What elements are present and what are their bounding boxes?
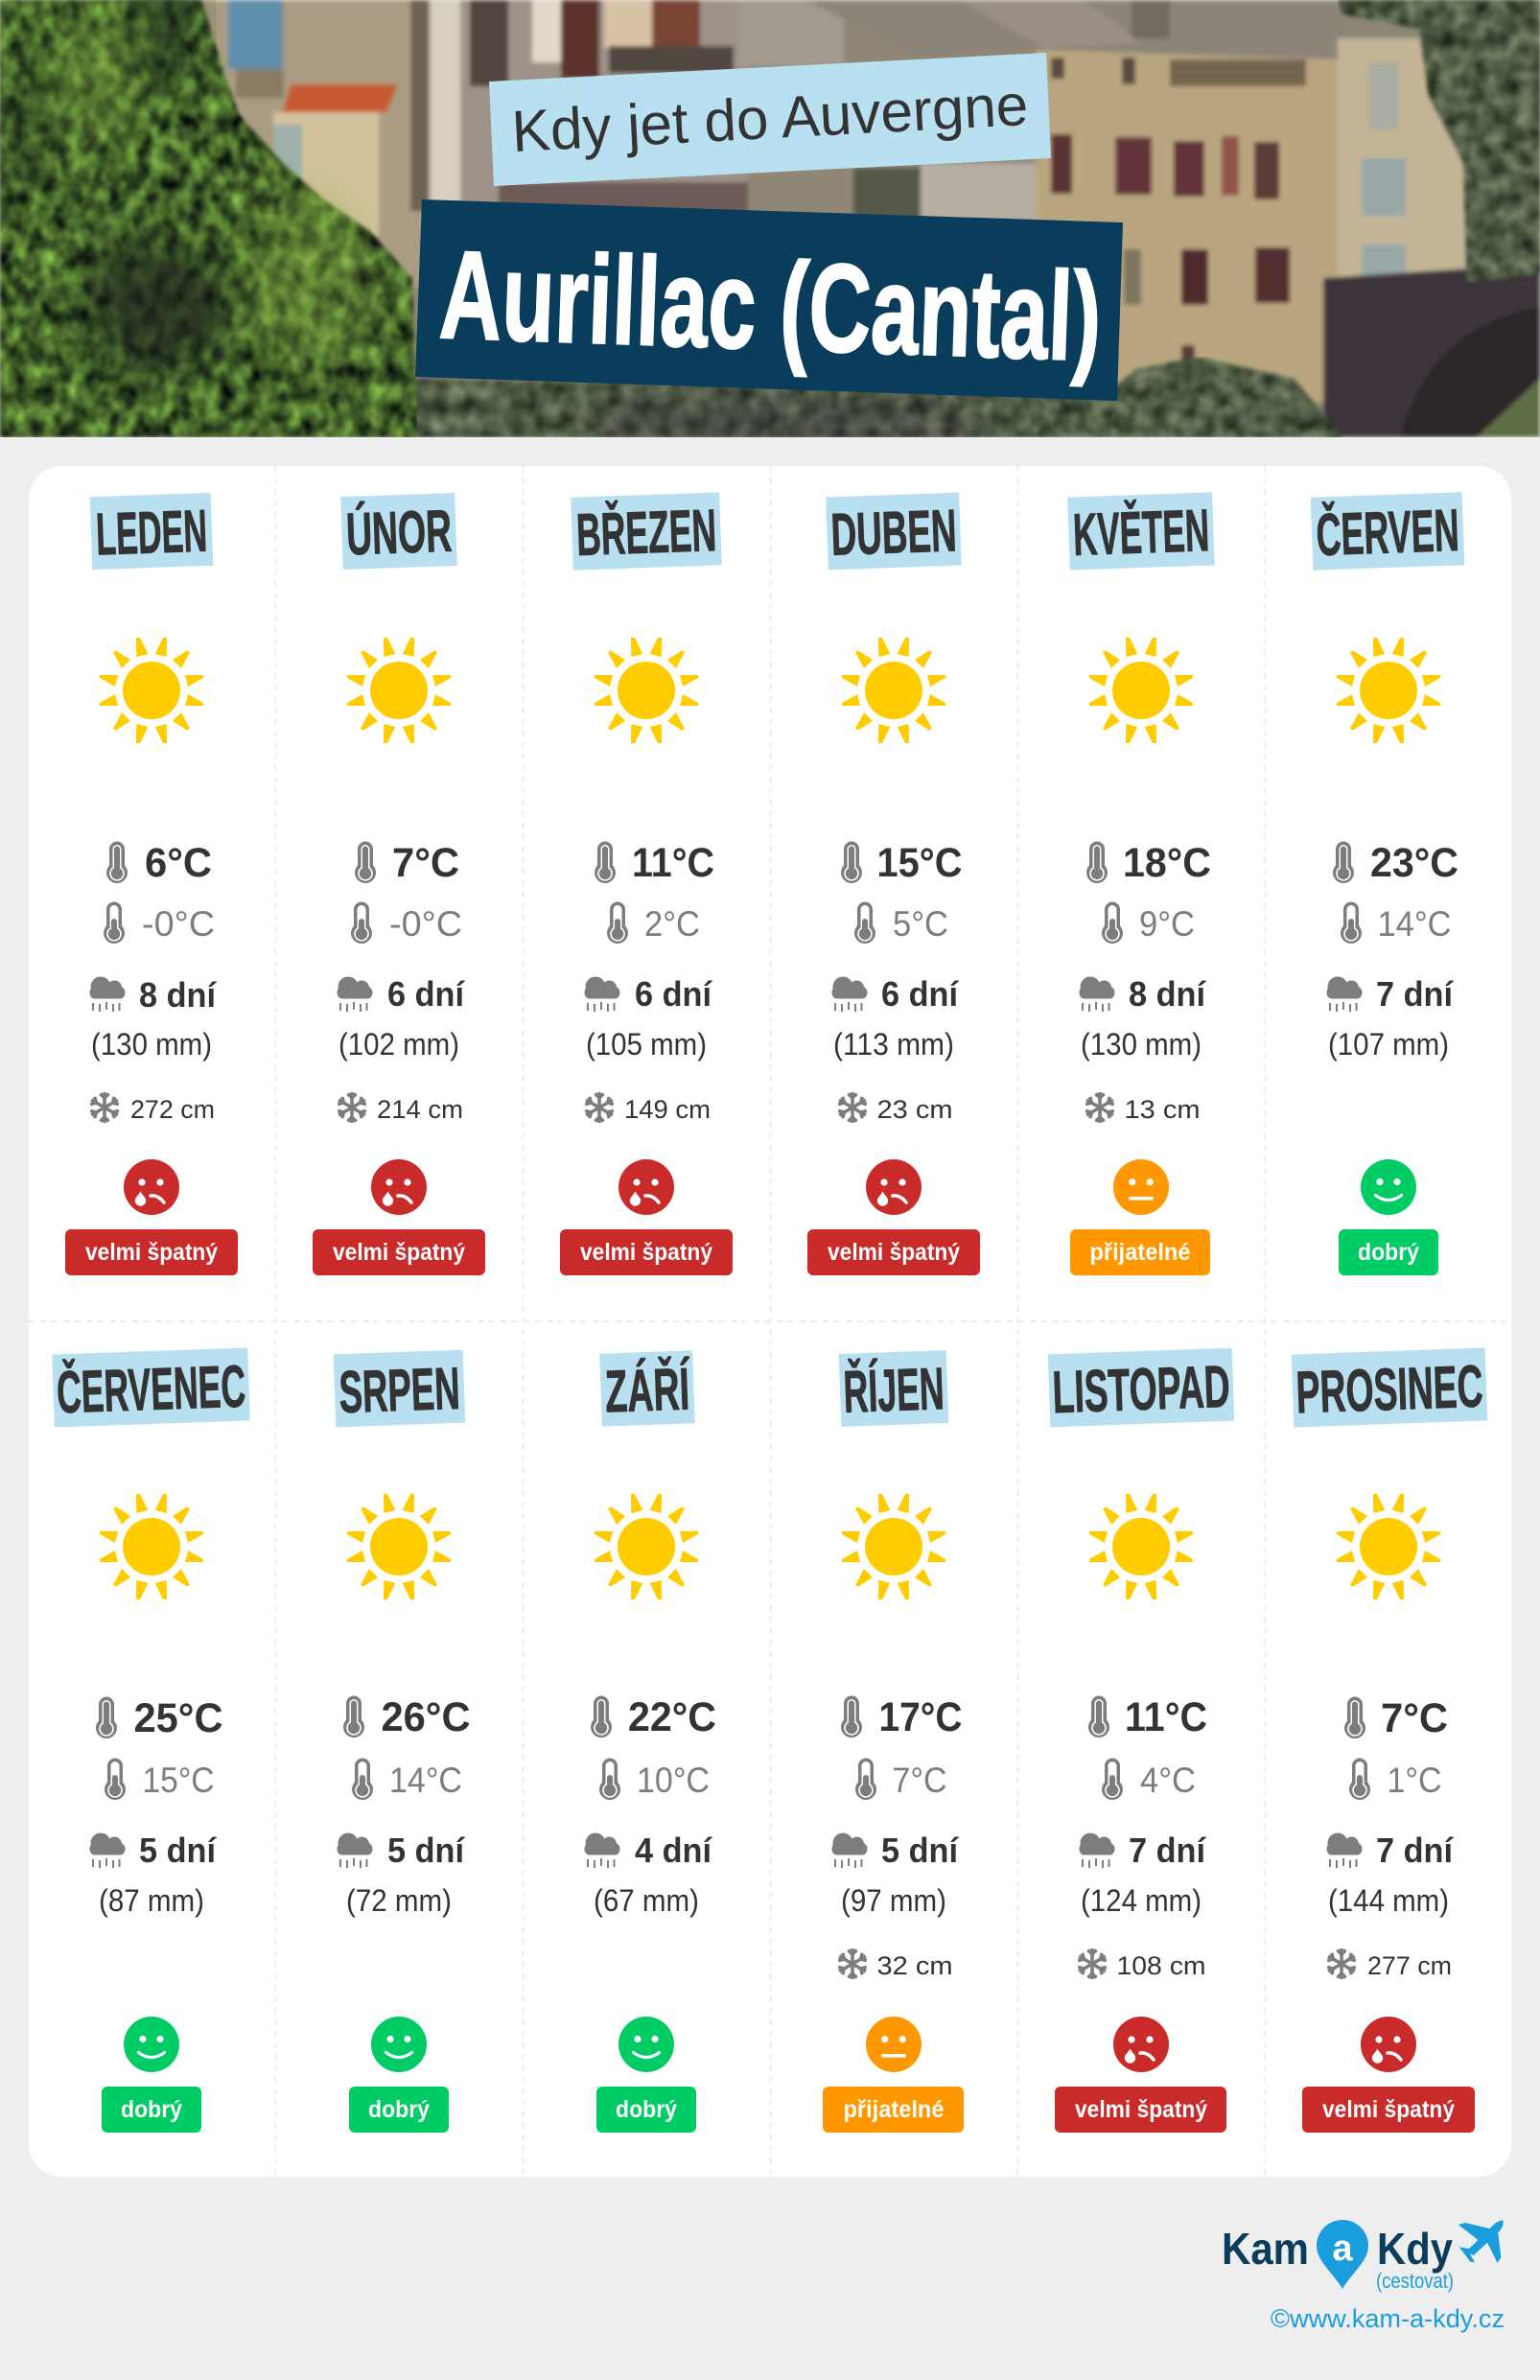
icon: rain cloud [1327,1833,1362,1868]
precipitation: (113 mm) [833,1027,954,1062]
month label: DUBEN [829,498,958,569]
icon: thermometer low [1102,1759,1123,1800]
month label [839,1350,948,1427]
icon: sun [347,1494,451,1599]
icon: thermometer low [854,901,875,944]
rainy days: 8 dní [139,975,217,1015]
icon: snowflake [1085,1092,1115,1123]
rating badge: velmi špatný [1322,2096,1455,2123]
month label [52,1347,250,1428]
high temperature: 22°C [628,1694,716,1740]
rainy days: 5 dní [881,1831,959,1870]
rating badge: velmi špatný [85,1239,218,1266]
icon: sun [1337,638,1440,743]
icon: thermometer low [855,1759,876,1800]
month label: ŘÍJEN [842,1356,945,1426]
rating badge [1070,1229,1210,1275]
rating badge: velmi špatný [1075,2096,1207,2123]
low temperature: -0°C [142,904,215,944]
icon: thermometer low [607,901,628,944]
precipitation: (124 mm) [1081,1883,1202,1918]
rainy days: 6 dní [881,974,959,1014]
icon: sun [842,638,945,743]
precipitation: (144 mm) [1328,1883,1449,1918]
icon: thermometer high [355,842,376,883]
title banner [415,199,1123,401]
month label: SRPEN [338,1356,461,1426]
high temperature: 7°C [392,840,459,886]
icon: sun [1089,638,1193,743]
icon: face [1113,1159,1169,1215]
low temperature: 4°C [1140,1761,1196,1800]
icon: thermometer high [841,1695,862,1738]
rating badge [1302,2087,1475,2133]
rainy days: 8 dní [1129,974,1206,1014]
icon: thermometer low [1102,901,1123,944]
icon: thermometer low [351,901,372,944]
icon: rain cloud [1327,976,1362,1012]
low temperature: 7°C [892,1761,947,1800]
snow depth: 149 cm [624,1095,711,1124]
icon: map pin: a [1332,2228,1353,2269]
logo tagline: (cestovat) [1376,2269,1454,2293]
rating badge: přijatelné [844,2096,945,2123]
icon: snowflake [837,1948,868,1979]
high temperature: 26°C [382,1694,470,1740]
icon: thermometer low [1349,1759,1370,1800]
rating badge [823,2087,964,2133]
low temperature: 10°C [637,1761,710,1800]
month label [571,492,722,571]
low temperature: 5°C [893,904,948,944]
low temperature: 14°C [1377,904,1452,944]
rating badge [1055,2087,1226,2133]
icon: snowflake [1326,1948,1357,1979]
icon: face [866,1159,922,1215]
panel: červen [1311,492,1464,1275]
icon: thermometer high [1086,842,1108,883]
icon: face [1361,2017,1416,2072]
snow depth: 13 cm [1124,1095,1201,1124]
icon: thermometer high [841,842,862,883]
snow depth: 277 cm [1367,1951,1452,1980]
month label: ZÁŘÍ [604,1356,691,1426]
rating badge [596,2087,696,2133]
icon: face [124,1159,179,1215]
panel: duben [807,493,980,1275]
precipitation: (72 mm) [346,1883,452,1918]
icon: face [371,2017,427,2072]
rating badge: velmi špatný [333,1239,465,1266]
month label [334,1350,465,1427]
high temperature: 23°C [1370,840,1458,886]
icon: airplane [1458,2220,1504,2263]
rating badge [349,2087,449,2133]
panel: únor [313,493,485,1275]
icon: snowflake [337,1092,367,1123]
low temperature: 15°C [142,1761,215,1800]
high temperature: 18°C [1123,840,1211,886]
icon: rain cloud [338,976,372,1012]
rainy days: 5 dní [387,1831,465,1870]
snow depth: 272 cm [130,1095,215,1124]
rating badge: dobrý [616,2096,677,2123]
icon: rain cloud [585,1833,619,1868]
snow depth: 32 cm [876,1951,953,1980]
rating badge [313,1229,485,1275]
precipitation: (97 mm) [841,1883,946,1918]
icon: sun [347,638,451,743]
icon: sun [842,1494,945,1599]
high temperature: 11°C [1125,1694,1207,1740]
month label: ČERVENEC [56,1354,246,1426]
icon: thermometer high [1088,1695,1109,1738]
icon: thermometer high [591,1695,612,1738]
rating badge: velmi špatný [580,1239,712,1266]
snow depth: 108 cm [1116,1951,1206,1980]
icon: thermometer high [1344,1697,1365,1738]
rating badge [560,1229,733,1275]
icon: rain cloud [585,976,619,1012]
icon: sun [1337,1494,1440,1599]
high temperature: 15°C [876,840,963,886]
icon: thermometer high [595,842,616,883]
precipitation: (130 mm) [91,1027,212,1062]
month label: KVĚTEN [1072,498,1210,569]
precipitation: (67 mm) [594,1883,699,1918]
icon: face [1113,2017,1169,2072]
high temperature: 7°C [1381,1695,1448,1741]
panel: prosinec [1292,1347,1487,2133]
low temperature: 1°C [1387,1761,1442,1800]
icon: face [866,2017,922,2072]
icon: face [618,1159,674,1215]
precipitation: (87 mm) [99,1883,204,1918]
title banner: Aurillac (Cantal) [437,223,1104,387]
panel: srpen [334,1350,470,2133]
icon: thermometer low [105,1759,126,1800]
month label: ÚNOR [345,499,453,568]
rating badge [807,1229,980,1275]
icon: snowflake [1077,1948,1108,1979]
rainy days: 4 dní [635,1831,712,1870]
panel: červenec [52,1347,250,2133]
high temperature: 25°C [134,1695,222,1741]
icon: snowflake [584,1092,615,1123]
icon: snowflake [837,1092,868,1123]
logo word Kdy: Kdy [1377,2224,1453,2274]
panel: leden [65,493,238,1275]
rating badge: dobrý [1358,1239,1419,1266]
rainy days: 5 dní [139,1831,217,1870]
high temperature: 11°C [632,840,714,886]
icon: thermometer high [343,1695,364,1738]
icon: rain cloud [832,1833,867,1868]
month label [826,493,962,570]
precipitation: (107 mm) [1328,1027,1449,1062]
rainy days: 6 dní [387,974,465,1014]
hero photo: Aurillac riverside houses [0,0,1540,460]
icon: face [124,2017,179,2072]
icon: thermometer low [1341,901,1362,944]
icon: thermometer low [104,901,125,944]
panel: říjen [823,1350,964,2133]
icon: sun [100,638,203,743]
icon: face [618,2017,674,2072]
icon: thermometer low [599,1759,620,1800]
rating badge [102,2087,201,2133]
rating badge: dobrý [121,2096,182,2123]
low temperature: 9°C [1139,904,1195,944]
low temperature: -0°C [389,904,462,944]
high temperature: 17°C [878,1694,963,1740]
month label [1067,492,1215,571]
low temperature: 2°C [644,904,700,944]
month label [599,1350,695,1427]
rainy days: 7 dní [1376,974,1454,1014]
icon: thermometer low [352,1759,373,1800]
month label [90,493,213,570]
website credit: ©www.kam-a-kdy.cz [1271,2304,1505,2333]
icon: rain cloud [90,976,125,1012]
icon: rain cloud [338,1833,372,1868]
icon: rain cloud [1080,1833,1114,1868]
subtitle banner: Kdy jet do Auvergne [510,72,1030,164]
month label [1048,1348,1234,1427]
panel: březen [560,492,733,1275]
icon: rain cloud [832,976,867,1012]
high temperature: 6°C [145,840,212,886]
rating badge: dobrý [368,2096,430,2123]
precipitation: (105 mm) [586,1027,707,1062]
icon: face [1361,1159,1416,1215]
rainy days: 7 dní [1376,1831,1454,1870]
icon: sun [100,1494,203,1599]
icon: rain cloud [90,1833,125,1868]
subtitle banner [489,53,1051,186]
rainy days: 7 dní [1129,1831,1206,1870]
month label [1311,492,1464,571]
month label: BŘEZEN [575,498,717,569]
snow depth: 23 cm [876,1095,953,1124]
rating badge: velmi špatný [828,1239,960,1266]
panel: listopad [1048,1348,1234,2133]
icon: sun [595,1494,698,1599]
precipitation: (130 mm) [1081,1027,1202,1062]
low temperature: 14°C [389,1761,462,1800]
panel: months card [29,466,1511,2177]
icon: thermometer high [106,842,128,883]
icon: thermometer high [96,1697,117,1738]
snow depth: 214 cm [377,1095,463,1124]
rating badge [65,1229,238,1275]
month label: LEDEN [95,498,208,569]
logo: Kam a Kdy [1222,2220,1504,2293]
rating badge: přijatelné [1089,1239,1191,1266]
icon: map pin [1317,2220,1368,2289]
rating badge [1339,1229,1438,1275]
precipitation: (102 mm) [338,1027,459,1062]
month label [340,493,457,570]
icon: sun [1089,1494,1193,1599]
month label: LISTOPAD [1051,1354,1231,1426]
rainy days: 6 dní [635,974,712,1014]
icon: sun [595,638,698,743]
icon: thermometer high [1333,842,1354,883]
panel: květen [1067,492,1215,1275]
icon: rain cloud [1080,976,1114,1012]
icon: snowflake [89,1092,120,1123]
panel: září [585,1350,716,2133]
icon: face [371,1159,427,1215]
logo word Kam: Kam [1222,2224,1309,2274]
